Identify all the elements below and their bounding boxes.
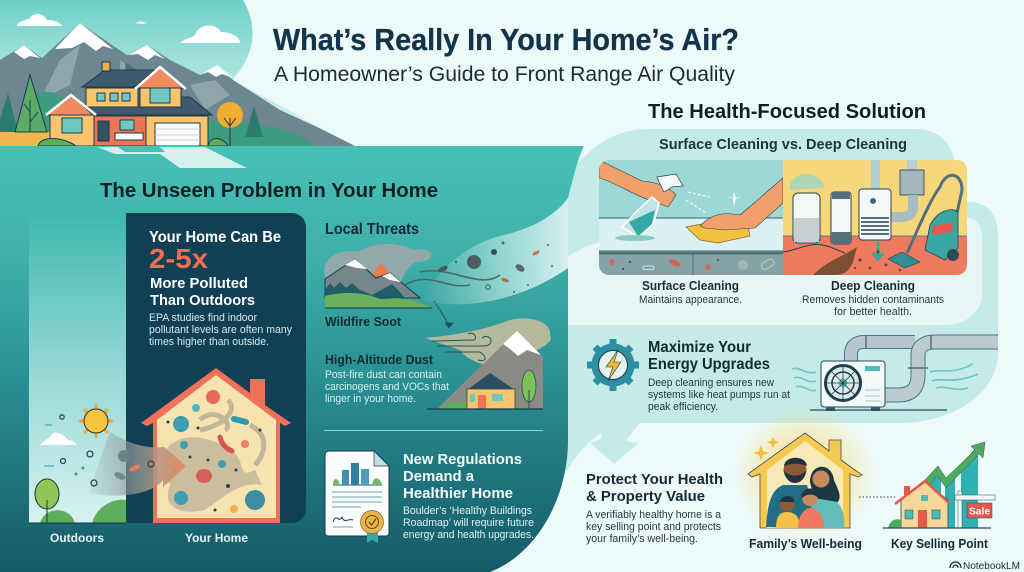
outdoor scene bbox=[29, 404, 186, 523]
sky blob with clouds bbox=[0, 0, 355, 146]
label: family's well-being: Family’s Well-being bbox=[749, 536, 862, 551]
label: your home: Your Home bbox=[185, 531, 248, 545]
text: high-altitude dust: linger in your home. bbox=[325, 393, 416, 405]
text: maximize energy upgrades: Deep cleaning ensures new bbox=[648, 377, 774, 389]
deep cleaning caption: for better health. bbox=[834, 306, 912, 318]
stat heading: Than Outdoors bbox=[150, 292, 255, 309]
house illustration bbox=[0, 62, 315, 146]
text: high-altitude dust: Post-fire dust can contain bbox=[325, 369, 442, 381]
text: new regulations: Healthier Home bbox=[403, 485, 513, 502]
heading: health-focused solution: The Health-Focused Solution bbox=[648, 101, 926, 123]
icon: home value with sale sign bbox=[883, 442, 995, 528]
icon: energy gear bbox=[587, 339, 639, 391]
teal problem section background bbox=[0, 146, 584, 572]
text: protect health and value: key selling point and protects bbox=[586, 521, 721, 533]
stat heading: More Polluted bbox=[150, 275, 248, 292]
text: high-altitude dust: carcinogens and VOCs that bbox=[325, 381, 449, 393]
text: new regulations: Boulder’s ‘Healthy Buildings bbox=[403, 505, 532, 517]
icon: family in house bbox=[733, 407, 877, 543]
text: maximize energy upgrades: Energy Upgrades bbox=[648, 356, 770, 373]
subtitle: A Homeowner’s Guide to Front Range Air Quality bbox=[274, 63, 736, 86]
text: new regulations bbox=[403, 451, 534, 541]
stat heading bbox=[149, 229, 281, 309]
deep cleaning caption: Removes hidden contaminants bbox=[802, 294, 944, 306]
text: protect health and value: Protect Your Health bbox=[586, 471, 723, 488]
title: What’s Really In Your Home’s Air? bbox=[273, 22, 739, 57]
icon: regulation document bbox=[325, 451, 389, 543]
panel: indoor vs outdoor card bbox=[29, 213, 306, 523]
text: maximize energy upgrades: systems like heat pumps run at bbox=[648, 389, 790, 401]
stat description: EPA studies find indoor bbox=[149, 312, 257, 324]
icon: wildfire mountain bbox=[324, 242, 553, 308]
text: new regulations: energy and health upgrades. bbox=[403, 529, 534, 541]
pale wind wave bbox=[420, 198, 568, 304]
text: maximize energy upgrades: peak efficiency. bbox=[648, 401, 718, 413]
driveway path bbox=[97, 147, 247, 168]
label: wildfire soot: Wildfire Soot bbox=[325, 314, 402, 329]
icon: home value with sale sign: Sale bbox=[969, 506, 990, 518]
surface cleaning caption: Surface Cleaning bbox=[642, 279, 739, 293]
icon: dust mountain and house bbox=[425, 318, 551, 409]
label: outdoors: Outdoors bbox=[50, 531, 104, 545]
arrow: down to next section bbox=[590, 422, 640, 464]
icon: polluted house bbox=[141, 368, 291, 523]
heading: unseen problem: The Unseen Problem in Your Home bbox=[100, 180, 438, 202]
text: protect health and value: A verifiably healthy home is a bbox=[586, 509, 722, 521]
label: key selling point: Key Selling Point bbox=[891, 536, 989, 551]
stat description: times higher than outside. bbox=[149, 336, 269, 348]
panel: deep cleaning illustration bbox=[783, 160, 967, 275]
icon: heat pump with pipes bbox=[792, 335, 998, 411]
text: protect health and value: & Property Value bbox=[586, 488, 705, 505]
text: high-altitude dust bbox=[325, 352, 449, 405]
text: maximize energy upgrades: Maximize Your bbox=[648, 339, 751, 356]
text: high-altitude dust: High-Altitude Dust bbox=[325, 352, 434, 367]
panel: surface cleaning illustration bbox=[599, 160, 783, 275]
deep cleaning caption: Deep Cleaning bbox=[831, 279, 915, 293]
mountain range bbox=[0, 23, 355, 146]
text: maximize energy upgrades bbox=[648, 339, 790, 413]
arrow: soot to dust bbox=[434, 301, 453, 328]
NotebookLM logo: NotebookLM bbox=[963, 561, 1020, 572]
text: new regulations: Roadmap’ will require future bbox=[403, 517, 534, 529]
heading: local threats: Local Threats bbox=[325, 221, 419, 238]
solution ribbon background bbox=[566, 129, 998, 472]
text: protect health and value: your family’s well-being. bbox=[586, 533, 698, 545]
heading: surface vs deep: Surface Cleaning vs. Deep Cleaning bbox=[659, 136, 907, 153]
text: new regulations: New Regulations bbox=[403, 451, 522, 468]
surface cleaning caption bbox=[639, 279, 742, 306]
surface cleaning caption: Maintains appearance. bbox=[639, 294, 742, 306]
text: new regulations: Demand a bbox=[403, 468, 475, 485]
stat heading: 2-5x bbox=[149, 243, 208, 274]
deep cleaning caption bbox=[802, 279, 944, 318]
stat description: pollutant levels are often many bbox=[149, 324, 292, 336]
stat description bbox=[149, 312, 292, 348]
text: protect health and value bbox=[586, 471, 723, 545]
stat heading: Your Home Can Be bbox=[149, 229, 281, 246]
